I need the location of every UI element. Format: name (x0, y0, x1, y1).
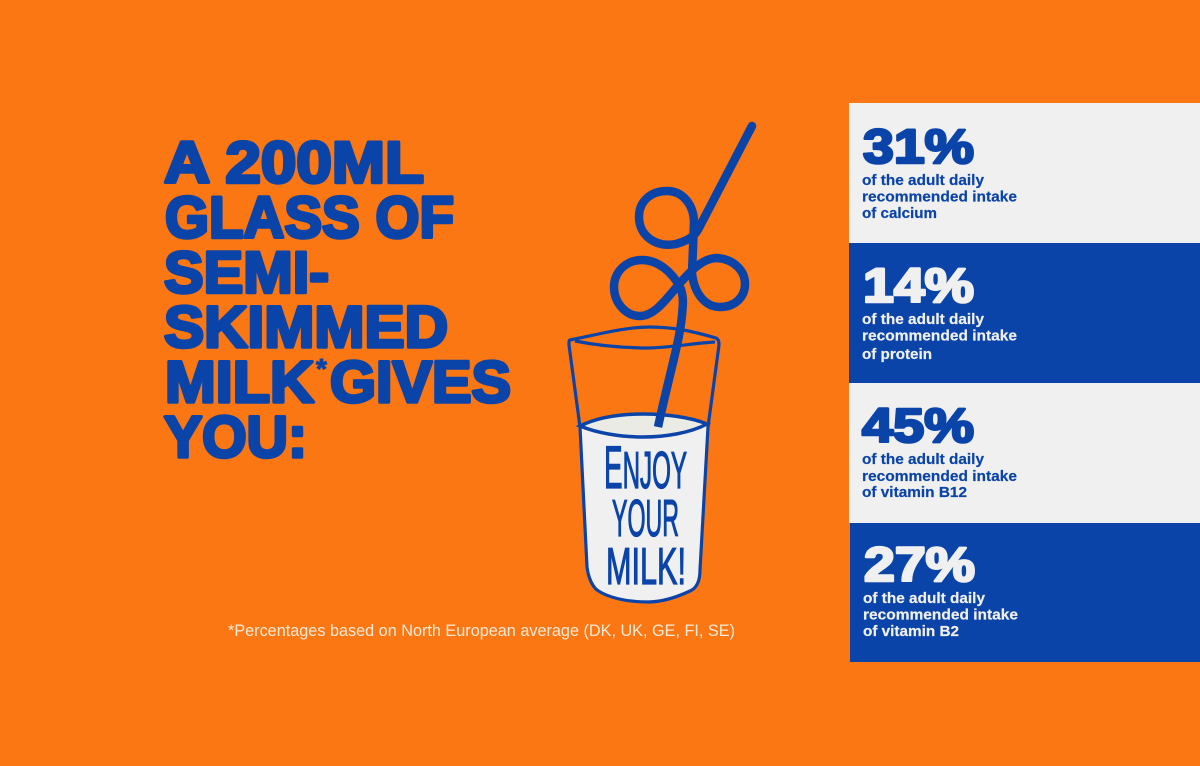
panel: vitamin B2: 27% (864, 539, 975, 592)
panel: protein: recommended intake (862, 328, 1017, 344)
glass lettering: ENJOY (604, 434, 687, 501)
title: MILK (165, 350, 314, 415)
panel: calcium: recommended intake (862, 188, 1017, 206)
title: GIVES (330, 350, 511, 415)
panel: protein: of protein (862, 346, 932, 363)
title: * (316, 353, 327, 384)
title (164, 130, 511, 470)
panel: calcium: 31% (863, 121, 974, 174)
glass lettering (604, 434, 687, 596)
panel: calcium: of calcium (862, 205, 937, 222)
panel: vitamin B12: of vitamin B12 (862, 484, 967, 501)
curly straw (614, 126, 752, 427)
panel: vitamin B12: 45% (862, 400, 974, 453)
panel: vitamin B2: of vitamin B2 (863, 623, 959, 640)
glass lettering: MILK! (606, 538, 686, 596)
panel: vitamin B12 (849, 383, 1200, 523)
illustration: glass of milk with curly straw (569, 126, 752, 602)
panel: vitamin B12: recommended intake (862, 468, 1017, 485)
milk fill (579, 414, 708, 602)
panel: protein (849, 243, 1200, 383)
panel: vitamin B12: of the adult daily (862, 451, 985, 468)
panel: protein: 14% (863, 260, 974, 313)
milk surface (580, 414, 707, 437)
panel: protein: of the adult daily (862, 311, 985, 328)
illustration: glass of milk with curly straw: YOUR (612, 490, 679, 548)
footnote: *Percentages based on North European average (DK, UK, GE, FI, SE) (228, 622, 735, 640)
title: SEMI- (164, 240, 329, 306)
title: A 200ML (164, 130, 424, 196)
panel: calcium: of the adult daily (862, 172, 985, 189)
panel: vitamin B2 (850, 523, 1200, 662)
title: YOU: (164, 405, 307, 470)
title: GLASS OF (165, 186, 454, 250)
panel: vitamin B2: recommended intake (863, 606, 1018, 624)
panel: calcium (849, 103, 1200, 243)
title: SKIMMED (164, 295, 448, 360)
panel: vitamin B2: of the adult daily (863, 590, 986, 607)
glass outline (569, 327, 719, 602)
